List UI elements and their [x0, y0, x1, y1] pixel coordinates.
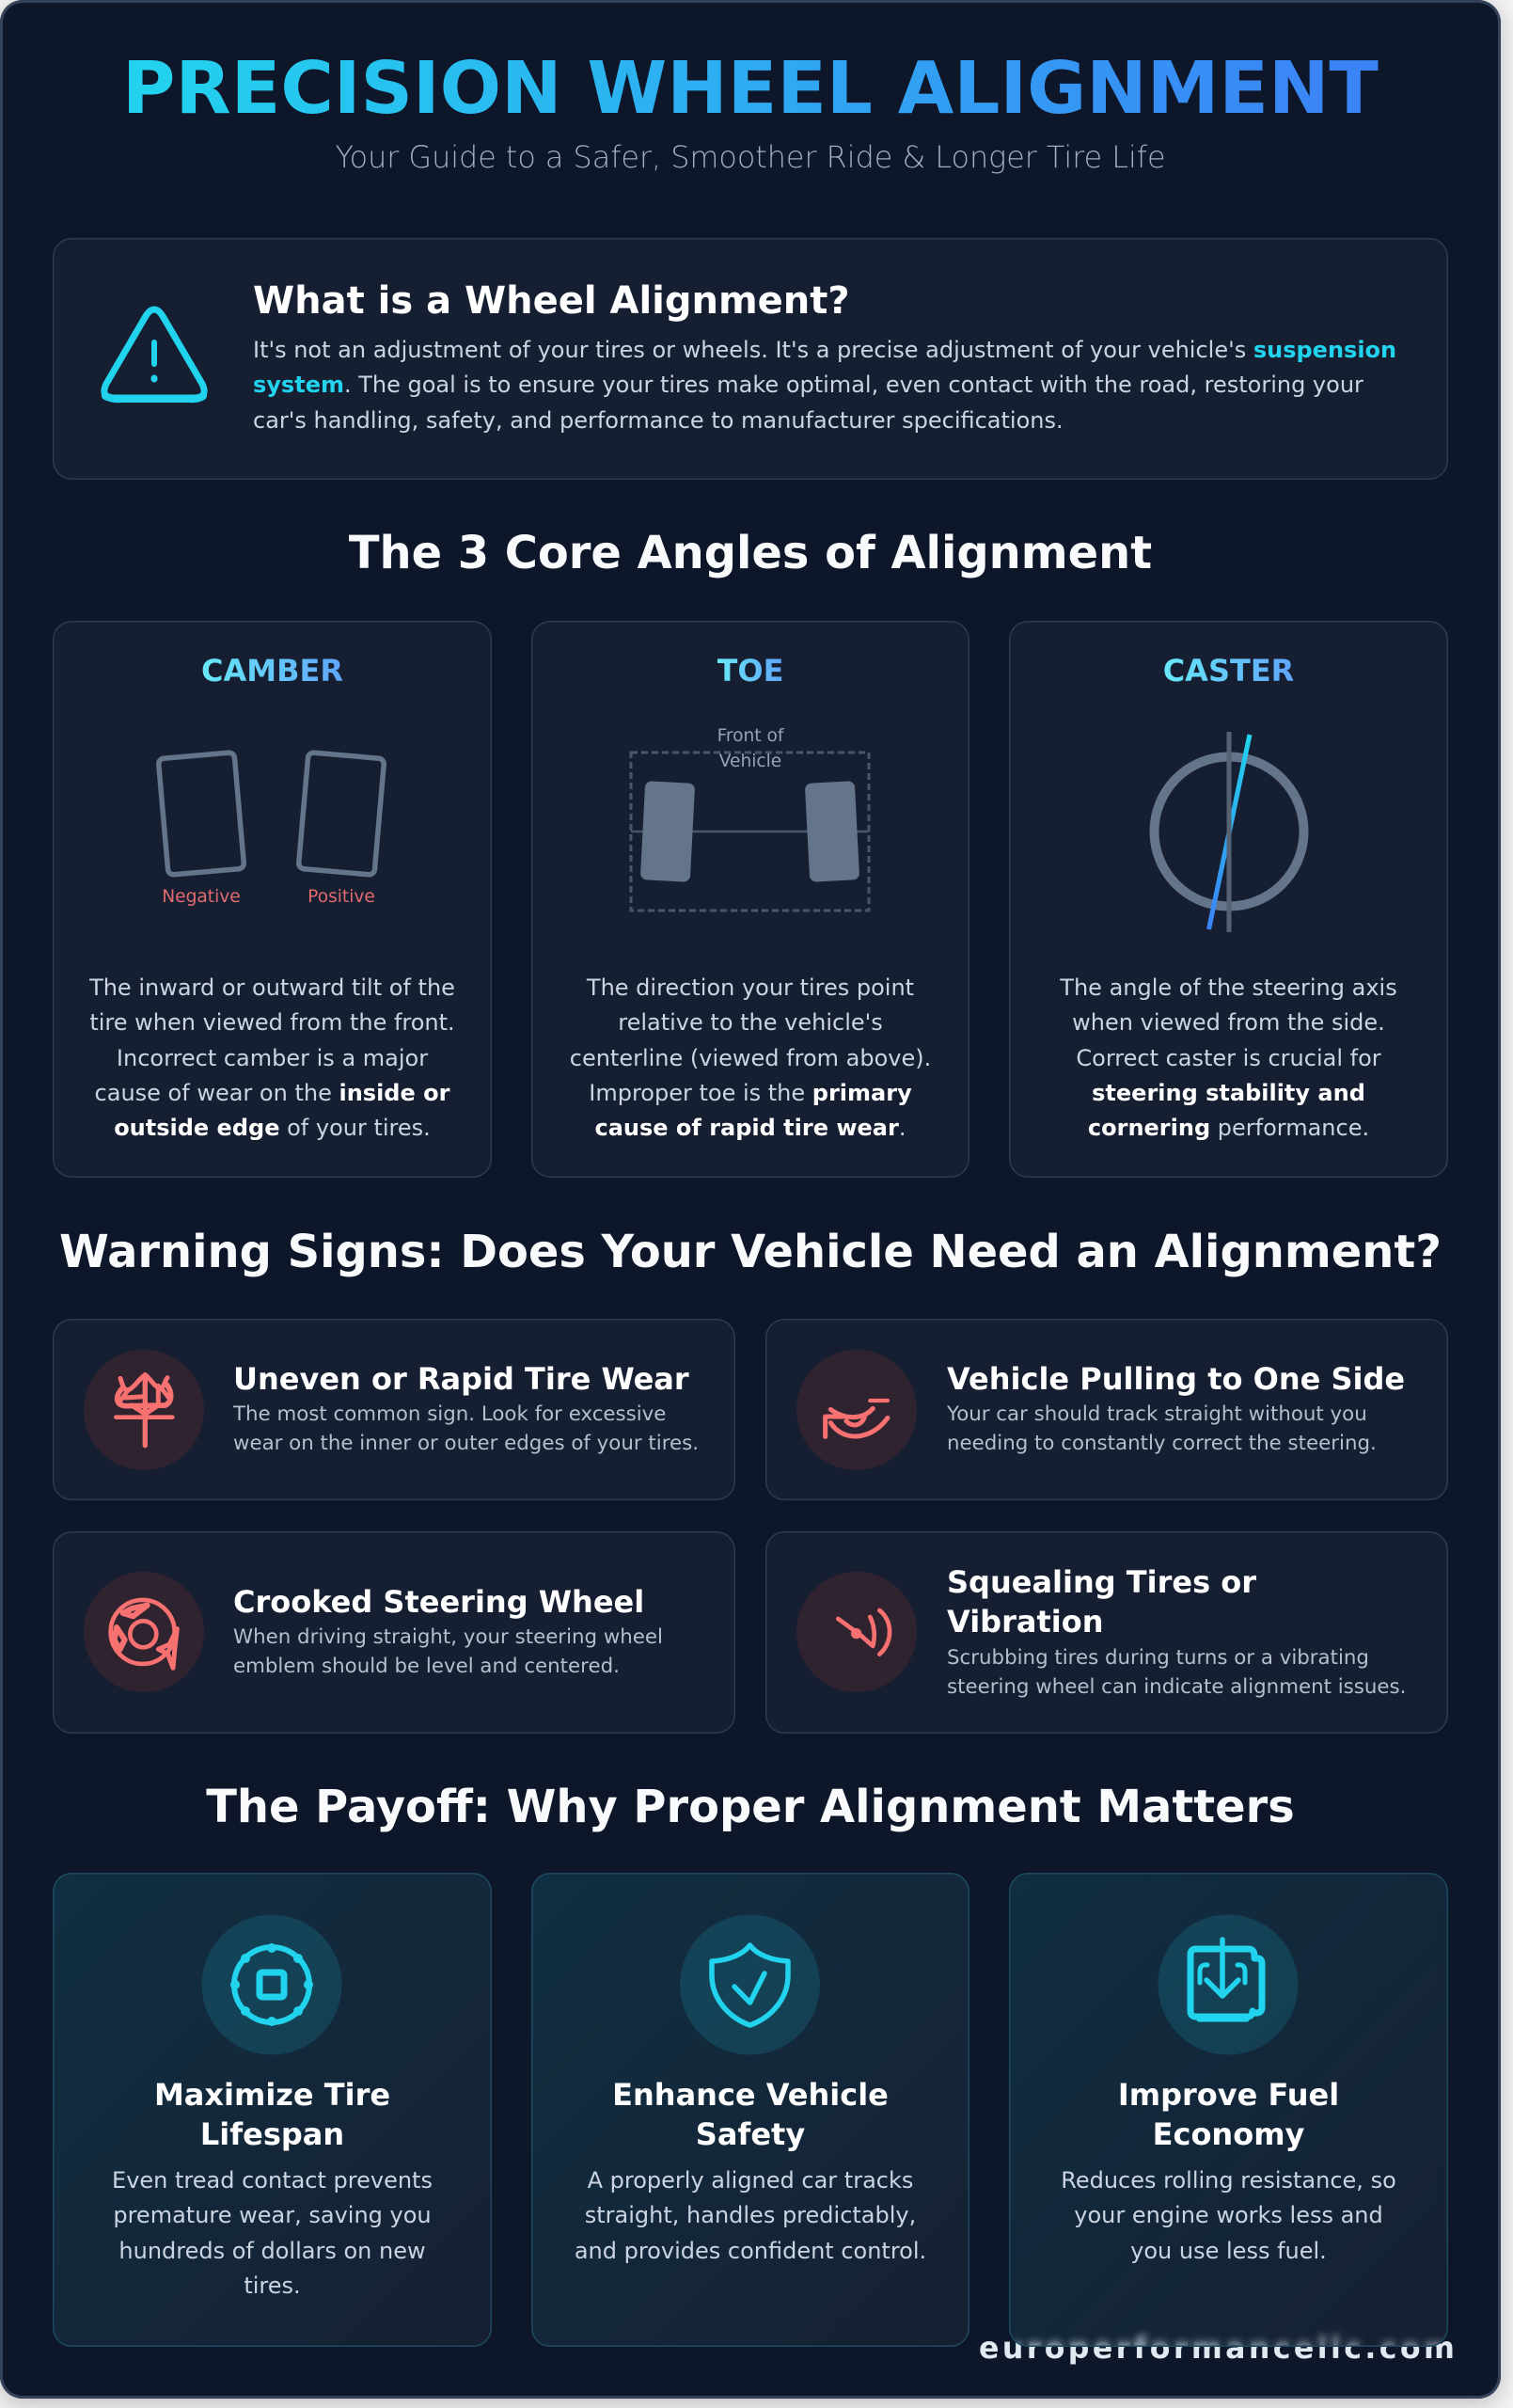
description	[947, 1646, 1406, 1699]
camber diagram	[156, 751, 386, 907]
description: emblem should be level and centered.	[233, 1655, 620, 1678]
camber description: Incorrect camber is a major	[117, 1045, 428, 1071]
icon: fuel	[1158, 1915, 1298, 2054]
title: Vibration	[947, 1604, 1103, 1640]
toe diagram: Front of	[717, 726, 784, 746]
description: steering wheel can indicate alignment issues.	[947, 1675, 1406, 1699]
title: Enhance Vehicle	[612, 2077, 889, 2113]
camber heading: CAMBER	[201, 653, 343, 689]
camber description: The inward or outward tilt of the	[89, 974, 455, 1001]
description: Scrubbing tires during turns or a vibrating	[947, 1646, 1369, 1670]
description	[1061, 2167, 1396, 2264]
description: The most common sign. Look for excessive	[233, 1402, 666, 1426]
icon: tire wear	[84, 1350, 204, 1470]
icon: warning triangle	[101, 307, 208, 403]
panel: enhance vehicle safety	[531, 1873, 969, 2347]
panel: maximize tire lifespan	[53, 1873, 492, 2347]
caster diagram	[1149, 732, 1309, 932]
title: Safety	[696, 2116, 805, 2152]
description: Reduces rolling resistance, so	[1061, 2167, 1396, 2194]
toe description	[570, 974, 931, 1141]
icon: pulling arrow	[796, 1350, 917, 1470]
title: Crooked Steering Wheel	[233, 1584, 644, 1620]
icon: steering wheel	[84, 1572, 204, 1692]
heading: core angles: The 3 Core Angles of Alignment	[349, 528, 1152, 579]
description: premature wear, saving you	[113, 2202, 432, 2228]
description	[947, 1402, 1377, 1455]
title: Vehicle Pulling to One Side	[947, 1361, 1405, 1397]
panel: squealing tires	[765, 1531, 1448, 1734]
footer url: europerformancellc.com	[979, 2332, 1458, 2366]
camber description: tire when viewed from the front.	[89, 1009, 455, 1036]
caster description: steering stability and	[1092, 1080, 1365, 1106]
icon: tire	[201, 1915, 342, 2054]
title	[154, 2077, 390, 2152]
toe description: relative to the vehicle's	[618, 1009, 883, 1036]
icon: shield	[680, 1915, 820, 2054]
description: your engine works less and	[1074, 2202, 1383, 2228]
title: Economy	[1153, 2116, 1304, 2152]
toe description: cause of rapid tire wear.	[594, 1115, 906, 1141]
toe heading: TOE	[717, 653, 783, 689]
panel: vehicle pulling	[765, 1319, 1448, 1500]
toe description: Improper toe is the primary	[589, 1080, 912, 1106]
title	[947, 1564, 1256, 1640]
description: A properly aligned car tracks	[588, 2167, 913, 2194]
description: It's not an adjustment of your tires or wheels. It's a precise adjustment of your vehicle's suspension	[253, 337, 1396, 363]
camber description: cause of wear on the inside or	[95, 1080, 449, 1106]
panel: toe	[531, 621, 969, 1178]
panel: caster	[1009, 621, 1448, 1178]
description	[233, 1402, 699, 1455]
description: tires.	[244, 2273, 301, 2299]
description: needing to constantly correct the steering.	[947, 1432, 1377, 1455]
description: straight, handles predictably,	[585, 2202, 916, 2228]
description: car's handling, safety, and performance to manufacturer specifications.	[253, 407, 1064, 434]
camber description	[89, 974, 455, 1141]
title	[612, 2077, 889, 2152]
description: system. The goal is to ensure your tires make optimal, even contact with the road, restoring your	[253, 372, 1363, 398]
toe description: centerline (viewed from above).	[570, 1045, 931, 1071]
description: When driving straight, your steering wheel	[233, 1625, 663, 1649]
title	[1118, 2077, 1339, 2152]
description: you use less fuel.	[1130, 2238, 1327, 2264]
toe diagram: Vehicle	[719, 752, 781, 771]
description	[253, 337, 1396, 434]
panel: what is a wheel alignment	[53, 238, 1448, 480]
caster description	[1060, 974, 1397, 1141]
heading: What is a Wheel Alignment?	[253, 279, 850, 323]
title: Lifespan	[200, 2116, 344, 2152]
description	[233, 1625, 663, 1678]
subtitle: Your Guide to a Safer, Smoother Ride & Longer Tire Life	[335, 140, 1166, 175]
panel: crooked steering wheel	[53, 1531, 735, 1734]
caster description: The angle of the steering axis	[1060, 974, 1397, 1001]
camber diagram: Positive	[307, 887, 375, 907]
camber description: outside edge of your tires.	[114, 1115, 431, 1141]
title: PRECISION WHEEL ALIGNMENT	[122, 47, 1379, 131]
panel: uneven tire wear	[53, 1319, 735, 1500]
caster description: Correct caster is crucial for	[1076, 1045, 1381, 1071]
description	[112, 2167, 433, 2299]
description: Even tread contact prevents	[112, 2167, 433, 2194]
title: Maximize Tire	[154, 2077, 390, 2113]
description: Your car should track straight without you	[947, 1402, 1367, 1426]
description	[575, 2167, 926, 2264]
title: Improve Fuel	[1118, 2077, 1339, 2113]
title: Squealing Tires or	[947, 1564, 1256, 1600]
panel: camber	[53, 621, 492, 1178]
heading: warning signs: Warning Signs: Does Your Vehicle Need an Alignment?	[59, 1227, 1442, 1278]
description: and provides confident control.	[575, 2238, 926, 2264]
icon: vibration	[796, 1572, 917, 1692]
camber diagram: Negative	[162, 887, 241, 907]
heading: payoff: The Payoff: Why Proper Alignment Matters	[206, 1782, 1295, 1833]
caster heading: CASTER	[1163, 653, 1294, 689]
toe description: The direction your tires point	[587, 974, 914, 1001]
title: Uneven or Rapid Tire Wear	[233, 1361, 689, 1397]
toe diagram	[630, 726, 871, 912]
description: hundreds of dollars on new	[118, 2238, 426, 2264]
caster description: cornering performance.	[1088, 1115, 1369, 1141]
description: wear on the inner or outer edges of your tires.	[233, 1432, 699, 1455]
panel: improve fuel economy	[1009, 1873, 1448, 2347]
caster description: when viewed from the side.	[1072, 1009, 1385, 1036]
